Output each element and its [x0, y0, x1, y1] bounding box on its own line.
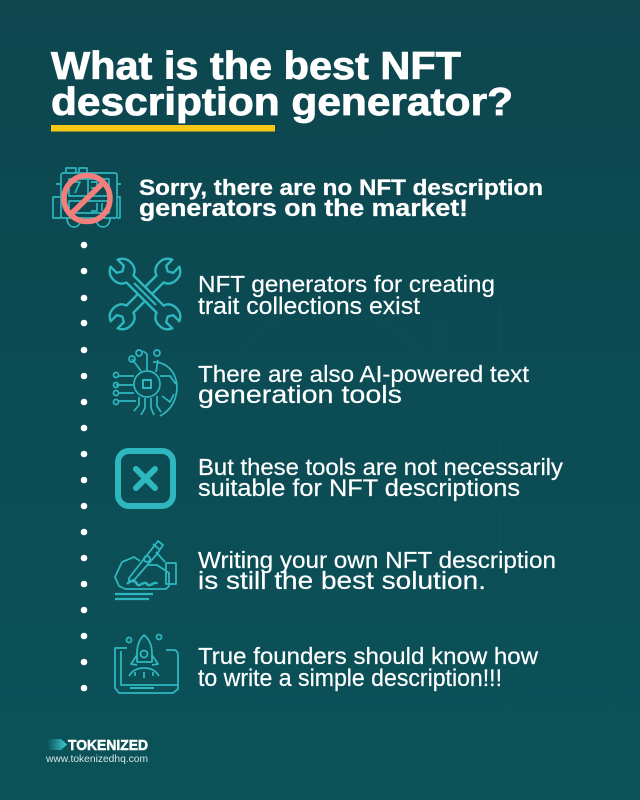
icon: hand writing with pen [115, 541, 176, 599]
callout text: generators on the market! [139, 195, 468, 222]
logo wordmark: TOKENIZED [68, 738, 148, 754]
text [198, 547, 556, 595]
icon: crossed-out calculator robot [53, 168, 121, 227]
text: is still the best solution. [198, 567, 486, 595]
website url: www.tokenizedhq.com [45, 754, 148, 765]
text: NFT generators for creating [198, 271, 495, 297]
dotted timeline [81, 242, 87, 691]
item: AI tools [114, 350, 529, 416]
footer logo [45, 738, 148, 765]
text: But these tools are not necessarily [198, 454, 563, 480]
logo mark [47, 739, 67, 750]
icon: AI head circuit [114, 350, 177, 416]
text: Writing your own NFT description [198, 547, 556, 573]
item: not suitable [118, 451, 563, 506]
text: There are also AI-powered text [198, 361, 529, 387]
text: to write a simple description!!! [198, 665, 502, 692]
text: True founders should know how [198, 643, 539, 669]
text: generation tools [198, 381, 402, 409]
title: description generator? [51, 81, 513, 124]
item: write your own [115, 541, 556, 599]
title underline [51, 125, 275, 132]
icon: x in rounded square [118, 451, 173, 506]
text: suitable for NFT descriptions [198, 475, 520, 502]
icon: rocket blueprint [115, 634, 178, 693]
title [51, 45, 513, 124]
callout text: Sorry, there are no NFT description [139, 175, 543, 200]
text: trait collections exist [198, 293, 420, 320]
item: founders [115, 634, 539, 693]
text [198, 271, 495, 320]
title: What is the best NFT [51, 45, 461, 88]
text [198, 361, 529, 409]
text [198, 454, 563, 502]
callout text [139, 175, 543, 222]
text [198, 643, 539, 692]
item: wrenches [105, 254, 495, 334]
icon: crossed wrenches [105, 254, 185, 334]
